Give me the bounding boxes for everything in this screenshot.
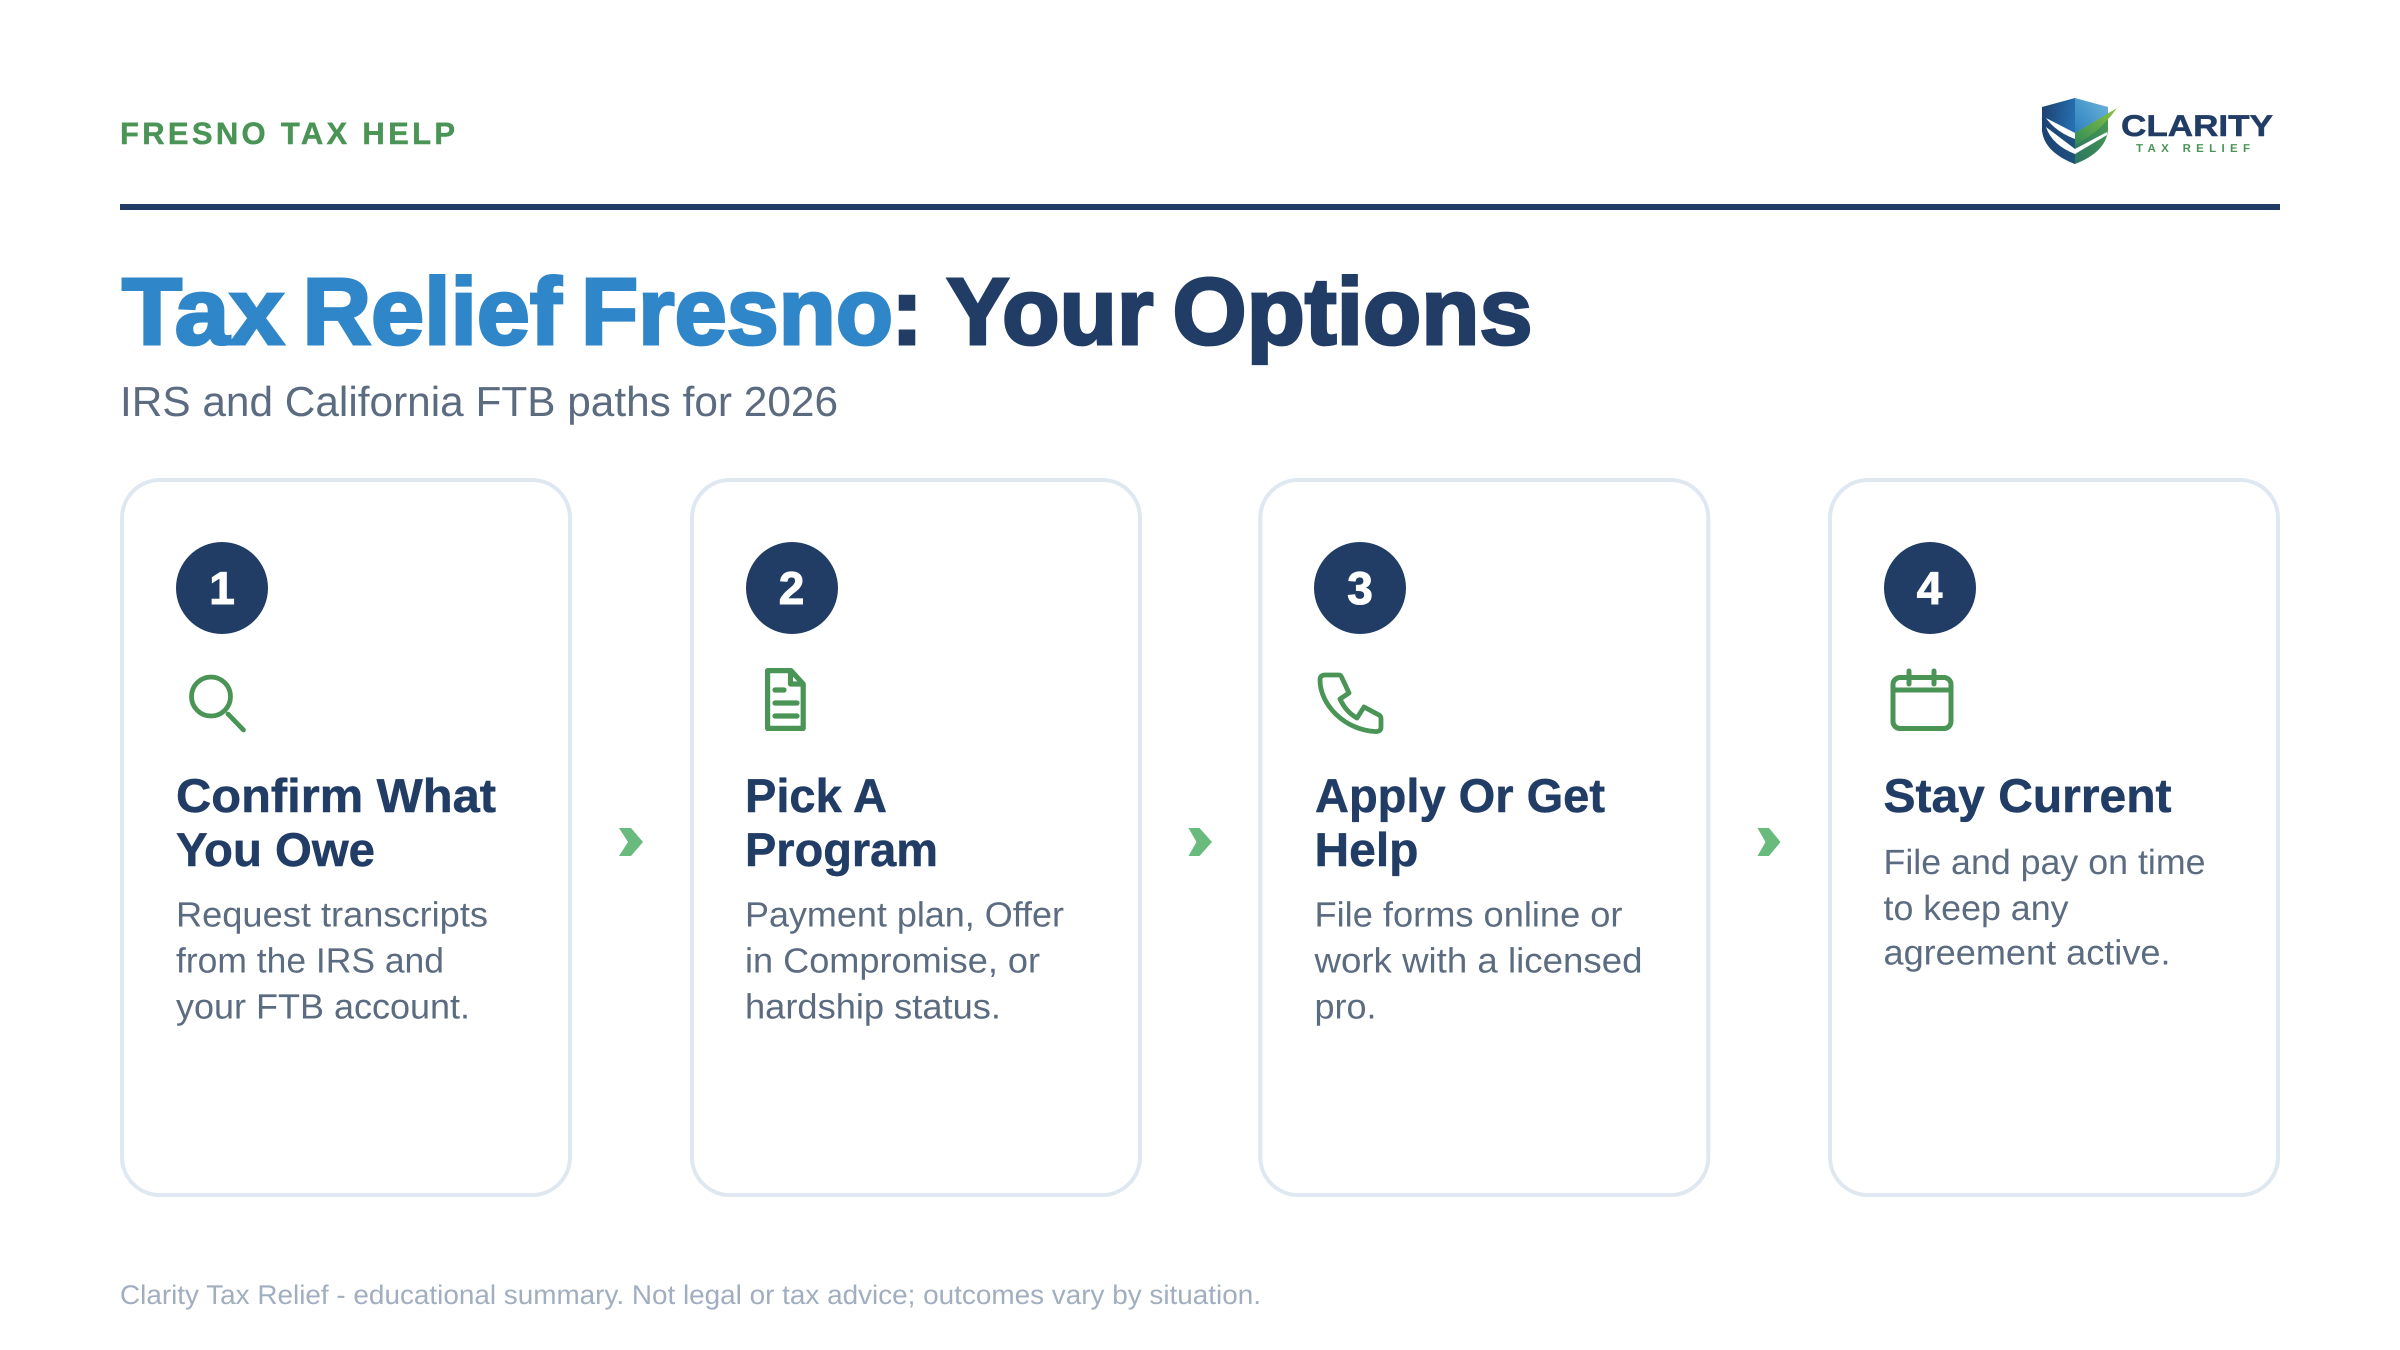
header rule [120,204,2280,210]
heading: Apply Or Get Help [1314,770,1605,877]
panel: step 3 [1260,480,1708,1195]
panel: step 1 [122,480,570,1195]
heading: Apply Or Get Help: Apply Or Get [1315,770,1605,823]
heading: Stay Current: Stay Current [1884,770,2172,823]
body text: to keep any [1884,889,2069,928]
arrow 1 [619,828,643,856]
body text: File and pay on time [1884,843,2206,882]
body text: hardship status. [745,988,1001,1026]
panel: step 2 [692,480,1140,1195]
title: Your [946,259,1154,365]
arrow 3 [1758,828,1780,856]
body text: your FTB account. [176,988,470,1026]
body text: work with a licensed [1313,942,1642,980]
icon: shield with check [2042,98,2117,164]
panel: step 4 [1830,480,2278,1195]
step number 3: 3 [1347,562,1373,614]
heading: Pick A Program [745,770,938,877]
title: Relief [302,259,562,365]
icon: phone [1320,675,1381,732]
footer disclaimer: Clarity Tax Relief - educational summary. Not legal or tax advice; outcomes vary by situation. [120,1280,1261,1310]
body text [745,896,1064,1026]
body text: from the IRS and [176,942,444,980]
body text: Payment plan, Offer [745,896,1064,934]
title: Tax [122,259,284,365]
body text: agreement active. [1884,934,2170,972]
body text: File forms online or [1314,896,1623,934]
body text [176,896,488,1026]
body text: in Compromise, or [745,942,1040,980]
heading: Confirm What You Owe: You Owe [176,824,375,877]
logo wordmark: CLARITY [2121,110,2273,143]
heading: Pick A Program: Pick A [745,770,887,823]
arrow 2 [1188,828,1212,856]
icon: calendar [1893,671,1951,728]
body text [1313,896,1642,1026]
title: Fresno [581,259,893,365]
eyebrow label: FRESNO TAX HELP [120,116,455,151]
step number 2: 2 [779,562,804,614]
step number 4: 4 [1917,562,1943,614]
step number 1 [176,542,268,634]
logo: Clarity Tax Relief [2042,98,2273,164]
subtitle: IRS and California FTB paths for 2026 [120,378,838,425]
heading: Confirm What You Owe [176,770,496,877]
body text: Request transcripts [176,896,488,934]
body text [1884,843,2206,972]
title: : [891,259,923,365]
step number 3 [1314,542,1406,634]
step number 2 [746,542,838,634]
icon: magnifier [192,677,244,730]
step number 1: 1 [209,562,235,614]
title: Options [1172,259,1532,365]
icon: document [768,671,803,728]
title [122,259,1532,365]
logo tagline: TAX RELIEF [2136,143,2250,155]
heading: Apply Or Get Help: Help [1314,824,1418,877]
heading: Pick A Program: Program [745,824,938,877]
body text: pro. [1314,988,1376,1026]
heading: Confirm What You Owe: Confirm What [176,770,496,823]
step number 4 [1884,542,1976,634]
